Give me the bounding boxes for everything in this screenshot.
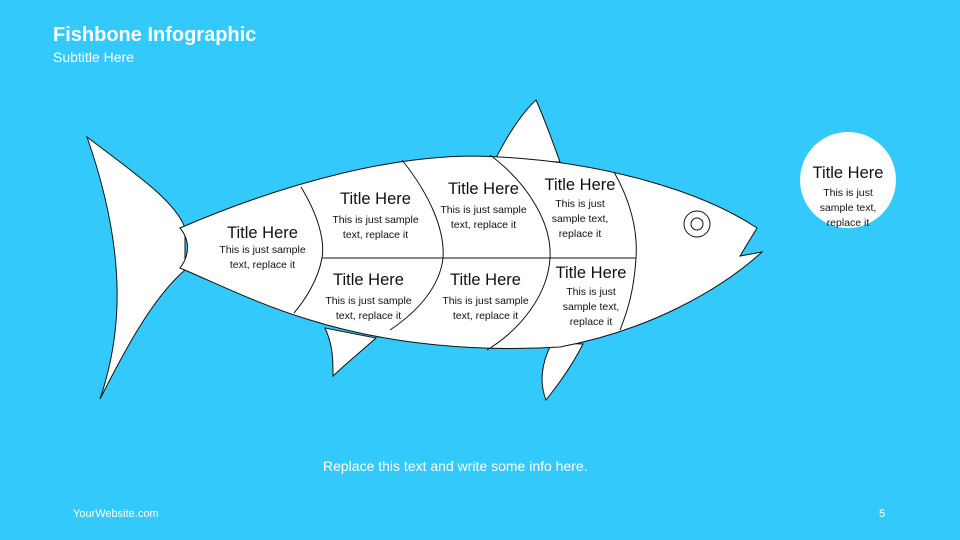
text: seg3 bottom [442,271,529,322]
text: seg2 top: Title Here [340,190,411,208]
text: circle callout: sample text, [820,202,876,214]
text: seg2 bottom: This is just sample [325,295,412,307]
text: circle callout: This is just [823,187,873,199]
text: seg4 bottom [556,264,626,328]
text: seg4 top: Title Here [545,176,615,194]
text: tail segment: Title Here [227,224,298,242]
text: seg2 top: This is just sample [332,214,419,226]
text: seg4 bottom: Title Here [556,264,626,282]
text: seg3 top: Title Here [448,180,519,198]
text: seg2 bottom: text, replace it [336,310,401,322]
text: seg2 bottom: Title Here [333,271,404,289]
body [180,156,762,349]
text: seg3 top: This is just sample [440,204,527,216]
text: circle callout: replace it [827,217,869,229]
front lower fin [542,343,583,400]
text: seg3 top [440,180,527,231]
text: tail segment [219,224,306,271]
text: seg3 bottom: This is just sample [442,295,529,307]
back lower fin [325,328,376,376]
text: seg3 top: text, replace it [451,219,516,231]
text: seg4 bottom: sample text, [563,301,619,313]
text: seg4 top: This is just [555,198,605,210]
text: seg4 bottom: replace it [570,316,612,328]
title: Fishbone Infographic [53,24,256,46]
text: circle callout [812,164,883,229]
text: seg4 top: replace it [559,228,601,240]
text: seg3 bottom: text, replace it [453,310,518,322]
text: seg2 bottom [325,271,412,322]
circle callout [800,132,896,228]
text: tail segment: This is just sample [219,244,306,256]
text: circle callout: Title Here [813,164,883,182]
text: seg4 top: sample text, [552,213,608,225]
text: tail segment: text, replace it [230,259,295,271]
subtitle: Subtitle Here [53,49,134,65]
text: seg2 top: text, replace it [343,229,408,241]
text: seg3 bottom: Title Here [450,271,521,289]
text: seg2 top [332,190,419,241]
top fin [495,100,560,162]
text: seg4 bottom: This is just [566,286,616,298]
page number: 5 [879,508,885,520]
segment dividers [294,187,323,313]
tail [87,137,185,399]
eye [684,211,710,237]
text: seg4 top [544,176,615,240]
footer website: YourWebsite.com [73,508,159,520]
info text: Replace this text and write some info here. [323,458,588,474]
